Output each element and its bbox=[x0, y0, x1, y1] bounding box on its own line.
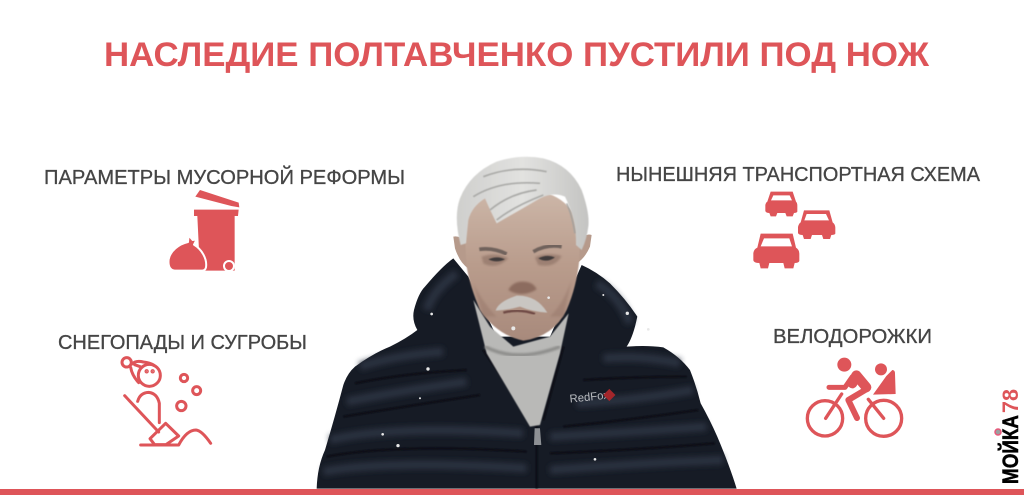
mouth bbox=[503, 311, 535, 314]
eyebrows bbox=[479, 246, 562, 254]
hair bbox=[457, 157, 589, 250]
logo pin mark bbox=[995, 429, 1001, 435]
hair strands bbox=[473, 169, 575, 233]
sweater bbox=[473, 300, 569, 427]
bottom bar bbox=[0, 489, 1024, 495]
eye shadow bbox=[482, 254, 562, 266]
title: НАСЛЕДИЕ ПОЛТАВЧЕНКО ПУСТИЛИ ПОД НОЖ bbox=[104, 36, 929, 74]
nose bbox=[508, 282, 537, 294]
heading: transport scheme: НЫНЕШНЯЯ ТРАНСПОРТНАЯ СХЕМА bbox=[616, 164, 981, 186]
heading: snowfall: СНЕГОПАДЫ И СУГРОБЫ bbox=[58, 332, 307, 354]
face bbox=[464, 190, 580, 341]
jacket seams bbox=[327, 347, 715, 489]
logo: Мойка 78: 78 bbox=[998, 389, 1023, 413]
jacket bbox=[317, 258, 737, 489]
eyes bbox=[488, 256, 555, 261]
snowflakes bbox=[381, 294, 650, 461]
heading: bike lanes: ВЕЛОДОРОЖКИ bbox=[773, 326, 932, 348]
icon: cyclist with child seat bbox=[807, 358, 902, 436]
zipper bbox=[534, 428, 541, 445]
icon: person shovelling snow bbox=[122, 358, 211, 445]
car: bottom bbox=[753, 234, 799, 268]
sweater collar shadow bbox=[485, 347, 560, 355]
heading: garbage reform: ПАРАМЕТРЫ МУСОРНОЙ РЕФОРМЫ bbox=[44, 165, 405, 189]
jacket logo: RedFox bbox=[569, 390, 610, 406]
cheek shadow bbox=[473, 280, 572, 317]
logo emblem on jacket bbox=[603, 389, 615, 401]
ears bbox=[453, 235, 592, 268]
moustache bbox=[496, 296, 547, 313]
logo: Мойка 78: МОЙКА bbox=[998, 415, 1023, 484]
head group bbox=[453, 157, 592, 341]
car: top bbox=[765, 192, 797, 216]
photo: man in dark puffer jacket bbox=[317, 157, 737, 489]
icon: trash bin with bag bbox=[169, 190, 239, 271]
icon: three cars bbox=[753, 192, 835, 268]
jacket quilting highlights bbox=[323, 273, 723, 472]
car: middle bbox=[798, 210, 835, 239]
